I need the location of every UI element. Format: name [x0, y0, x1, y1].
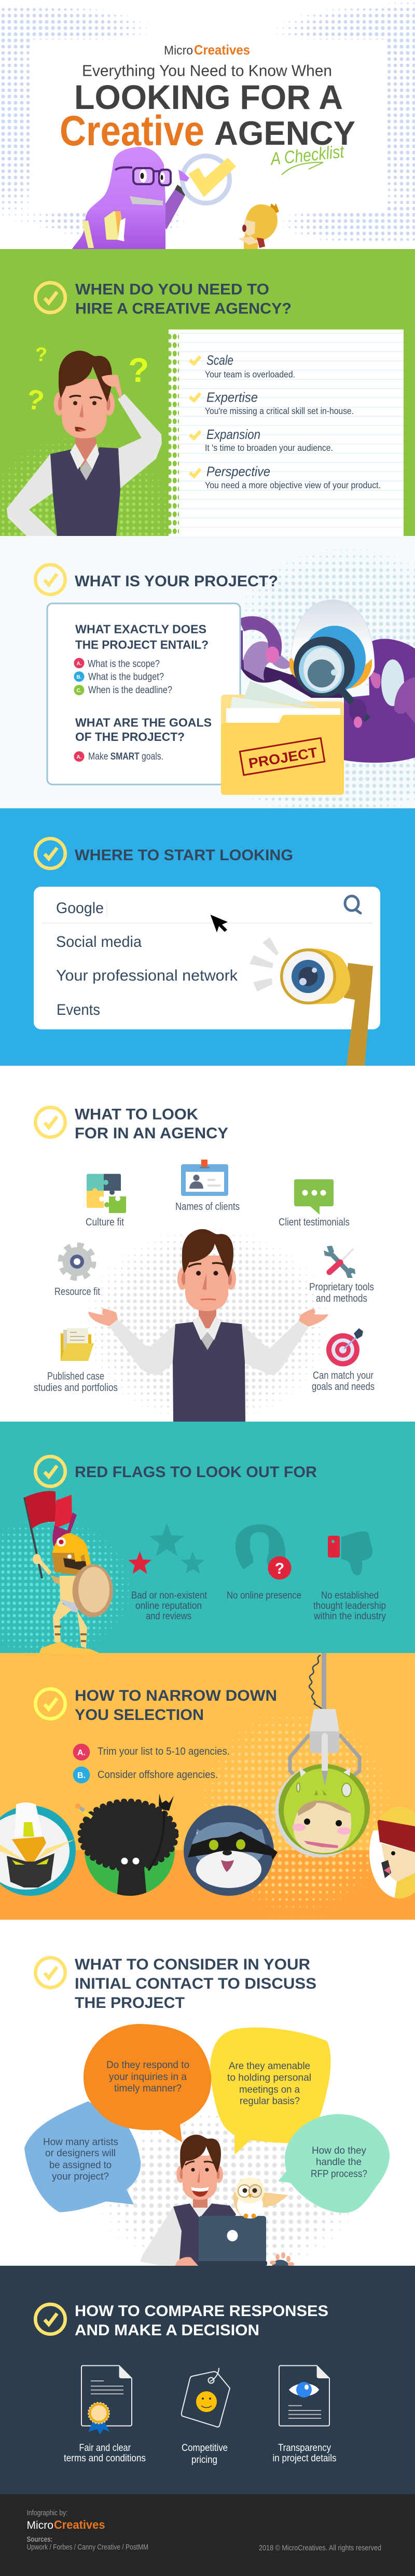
item: competitive pricing: pricing	[191, 2454, 217, 2465]
panel: initial contact	[0, 1920, 415, 2266]
list: offshore: B.	[77, 1771, 86, 1780]
stamp: PROJECT	[247, 745, 319, 772]
item: can match goals	[312, 1328, 375, 1393]
footer logo: Micro	[27, 2519, 53, 2531]
footer logo	[27, 2518, 105, 2531]
bubble: artists assigned	[24, 2101, 141, 2212]
item: resource fit	[54, 1246, 100, 1298]
heading	[75, 281, 292, 317]
smiling man at laptop	[140, 2134, 294, 2266]
question one	[75, 623, 209, 652]
item: expertise: You're missing a critical skill set in-house.	[205, 406, 354, 416]
item: culture fit: Culture fit	[86, 1216, 124, 1228]
item: expertise: Expertise	[206, 390, 258, 405]
heading: RED FLAGS TO LOOK OUT FOR	[75, 1464, 317, 1481]
purple monster with checkmark	[72, 147, 236, 250]
item: no online presence: No online presence	[227, 1590, 301, 1601]
title: AGENCY	[214, 114, 355, 152]
item: no thought leadership	[313, 1532, 386, 1622]
check icon	[35, 1456, 65, 1486]
bubble: timely response: Do they respond to	[106, 2059, 189, 2071]
sources: Sources:	[27, 2536, 53, 2544]
a checklist tagline: A Checklist	[269, 142, 345, 169]
check icon	[35, 1107, 65, 1137]
bubble: personal meetings	[210, 2028, 331, 2155]
item: no online presence	[227, 1524, 301, 1601]
search results: Events	[57, 1001, 100, 1018]
bubble: timely response	[84, 2024, 211, 2142]
list: smart goals: Make SMART goals.	[88, 751, 163, 762]
sources	[27, 2536, 148, 2552]
panel: red flags	[0, 1422, 415, 1676]
stamp	[240, 738, 325, 775]
subtitle: Everything You Need to Know When	[82, 62, 332, 80]
panel: how to narrow down	[0, 1653, 415, 1920]
list: scope, budget, deadline: B.	[77, 674, 82, 680]
card	[47, 603, 240, 784]
list: smart goals: A.	[77, 754, 82, 760]
item: no online presence: ?	[275, 1560, 284, 1577]
item: terms and conditions	[64, 2366, 146, 2464]
title: LOOKING FOR A	[74, 78, 343, 116]
question marks	[25, 344, 149, 417]
bubble: artists assigned: your project?	[52, 2171, 109, 2182]
item: client testimonials: Client testimonials	[279, 1216, 350, 1228]
search box	[34, 887, 380, 1029]
bubble: artists assigned: How many artists	[43, 2137, 118, 2148]
item: culture fit	[86, 1174, 126, 1228]
icon: search	[345, 896, 361, 913]
heading: WHAT IS YOUR PROJECT?	[75, 573, 278, 590]
list: scope, budget, deadline: C.	[77, 688, 82, 694]
heading: WHERE TO START LOOKING	[75, 847, 293, 864]
panel: where to start looking	[0, 808, 415, 1066]
item: no thought leadership: No established	[321, 1590, 379, 1601]
laptop	[197, 2216, 267, 2266]
heading: HOW TO NARROW DOWN	[75, 1687, 277, 1704]
panel: when do you need to hire	[0, 249, 415, 536]
item: proprietary tools: Proprietary tools	[309, 1281, 374, 1293]
raccoon egg	[184, 1806, 278, 1896]
heading: HIRE A CREATIVE AGENCY?	[75, 300, 292, 317]
question one: WHAT EXACTLY DOES	[75, 623, 206, 636]
bubble: rfp process	[278, 2114, 390, 2213]
telescope eye	[250, 937, 373, 1066]
bubble: artists assigned: be assigned to	[49, 2159, 112, 2171]
check icon	[35, 838, 65, 869]
credit: Infographic by:	[27, 2509, 67, 2517]
item: terms and conditions: Fair and clear	[79, 2442, 131, 2454]
item: scale: Your team is overloaded.	[205, 369, 295, 380]
item: scale: Scale	[206, 352, 233, 368]
item: proprietary tools	[309, 1246, 374, 1304]
heading: YOU SELECTION	[75, 1706, 204, 1724]
item: no thought leadership: within the industry	[313, 1611, 386, 1622]
heading: AND MAKE A DECISION	[75, 2322, 259, 2339]
heading	[75, 1687, 277, 1724]
claw head	[310, 1709, 339, 1786]
item: expansion: Expansion	[206, 426, 260, 442]
title: Creative	[60, 107, 204, 155]
panel: what to look for	[34, 1106, 375, 1422]
notebook	[169, 329, 404, 536]
item: expertise	[190, 390, 354, 416]
bubble: timely response: your inquiries in a	[109, 2071, 187, 2083]
panel: what is your project	[0, 536, 415, 808]
heading: FOR IN AN AGENCY	[75, 1125, 228, 1142]
project folder	[221, 681, 344, 795]
cursor	[211, 915, 228, 932]
heading	[75, 1956, 316, 2012]
search results: Google	[56, 900, 104, 917]
item: published case studies: studies and portfolios	[34, 1382, 118, 1394]
dino egg	[275, 1764, 370, 1857]
item: expansion: It 's time to broaden your audience.	[205, 443, 333, 453]
afro silhouette egg	[75, 1794, 176, 1899]
bubble: artists assigned: or designers will	[45, 2147, 116, 2159]
warrior with red flag	[24, 1491, 113, 1654]
sources: Upwork / Forbes / Canny Creative / PostMM	[27, 2543, 148, 2552]
heading: WHAT TO LOOK	[75, 1106, 198, 1123]
item: reviews	[128, 1523, 208, 1622]
list: trim: A.	[77, 1748, 86, 1757]
list: scope, budget, deadline: What is the scope?	[88, 659, 160, 670]
bubble: personal meetings: meetings on a	[239, 2084, 300, 2095]
octopus with magnifier	[240, 600, 415, 763]
panel: compare responses	[0, 2266, 415, 2495]
search results	[56, 900, 238, 1018]
item: can match goals: Can match your	[313, 1370, 374, 1382]
item: scale	[190, 352, 295, 380]
logo	[164, 42, 250, 58]
list: scope, budget, deadline	[74, 658, 172, 696]
bubble: timely response: timely manner?	[114, 2083, 182, 2094]
question marks: ?	[128, 351, 149, 389]
bubble: personal meetings: Are they amenable	[229, 2060, 310, 2072]
logo: Micro	[164, 44, 193, 58]
question marks: ?	[25, 383, 46, 417]
list: scope, budget, deadline: When is the deadline?	[88, 685, 172, 696]
heading: HOW TO COMPARE RESPONSES	[75, 2303, 328, 2320]
list: offshore: Consider offshore agencies.	[98, 1769, 218, 1781]
list: offshore	[73, 1767, 218, 1783]
shrugging man	[88, 1229, 328, 1422]
samurai egg	[369, 1807, 415, 1899]
item: transparency	[273, 2366, 337, 2464]
item: transparency: Transparency	[278, 2442, 331, 2454]
check icon	[35, 1958, 65, 1988]
a checklist tagline	[269, 142, 345, 175]
item: resource fit: Resource fit	[54, 1286, 100, 1298]
search results: Social media	[56, 933, 142, 950]
question two: OF THE PROJECT?	[75, 730, 185, 743]
question two	[75, 716, 212, 743]
check icon	[35, 283, 65, 312]
heading	[75, 1106, 228, 1142]
item: terms and conditions: terms and conditions	[64, 2453, 146, 2464]
owl	[233, 2178, 288, 2219]
item: names of clients	[175, 1160, 240, 1213]
heading: INITIAL CONTACT TO DISCUSS	[75, 1975, 316, 1992]
claw	[290, 1653, 359, 1776]
heading	[75, 2303, 328, 2339]
item: expansion	[190, 426, 333, 453]
copyright: 2018 © MicroCreatives. All rights reserved	[259, 2544, 381, 2553]
yellow mini character	[239, 203, 279, 250]
item: names of clients: Names of clients	[175, 1201, 240, 1213]
item: reviews: Bad or non-existent	[131, 1590, 208, 1601]
heading: WHEN DO YOU NEED TO	[75, 281, 269, 298]
list: trim	[73, 1744, 230, 1760]
item: reviews: online reputation	[135, 1601, 202, 1611]
item: competitive pricing: Competitive	[182, 2442, 228, 2454]
list: scope, budget, deadline: What is the budget?	[88, 672, 164, 683]
question one: THE PROJECT ENTAIL?	[75, 638, 209, 652]
bubble: rfp process: handle the	[316, 2156, 362, 2168]
list: scope, budget, deadline: A.	[77, 661, 82, 667]
bubble: rfp process: How do they	[312, 2145, 366, 2156]
heading: WHAT TO CONSIDER IN YOUR	[75, 1956, 310, 1973]
check icon	[35, 564, 65, 595]
panel: header	[0, 0, 415, 250]
question marks: ?	[35, 344, 47, 366]
list: trim: Trim your list to 5-10 agencies.	[98, 1746, 230, 1757]
worried man	[7, 351, 162, 536]
search results: Your professional network	[56, 967, 238, 984]
title	[60, 78, 355, 155]
item: perspective	[190, 464, 381, 490]
robot egg	[0, 1802, 76, 1896]
item: published case studies	[34, 1328, 118, 1394]
item: published case studies: Published case	[47, 1370, 104, 1382]
heading: THE PROJECT	[75, 1994, 185, 2012]
item: no thought leadership: thought leadership	[313, 1601, 386, 1611]
check icon	[35, 2304, 65, 2334]
bubble: rfp process: RFP process?	[311, 2168, 367, 2180]
item: perspective: You need a more objective view of your product.	[205, 480, 381, 490]
bubble: personal meetings: regular basis?	[240, 2096, 300, 2107]
logo: Creatives	[194, 42, 250, 58]
item: can match goals: goals and needs	[312, 1381, 375, 1393]
item: proprietary tools: and methods	[316, 1292, 367, 1304]
bubble: personal meetings: to holding personal	[227, 2072, 311, 2084]
item: client testimonials	[279, 1179, 350, 1228]
question two: WHAT ARE THE GOALS	[75, 716, 212, 729]
item: competitive pricing	[182, 2368, 230, 2465]
footer logo: Creatives	[54, 2518, 105, 2531]
item: transparency: in project details	[273, 2453, 337, 2464]
check icon	[35, 1689, 65, 1719]
item: reviews: and reviews	[146, 1611, 191, 1622]
panel: footer	[0, 2495, 415, 2576]
item: perspective: Perspective	[206, 464, 270, 479]
